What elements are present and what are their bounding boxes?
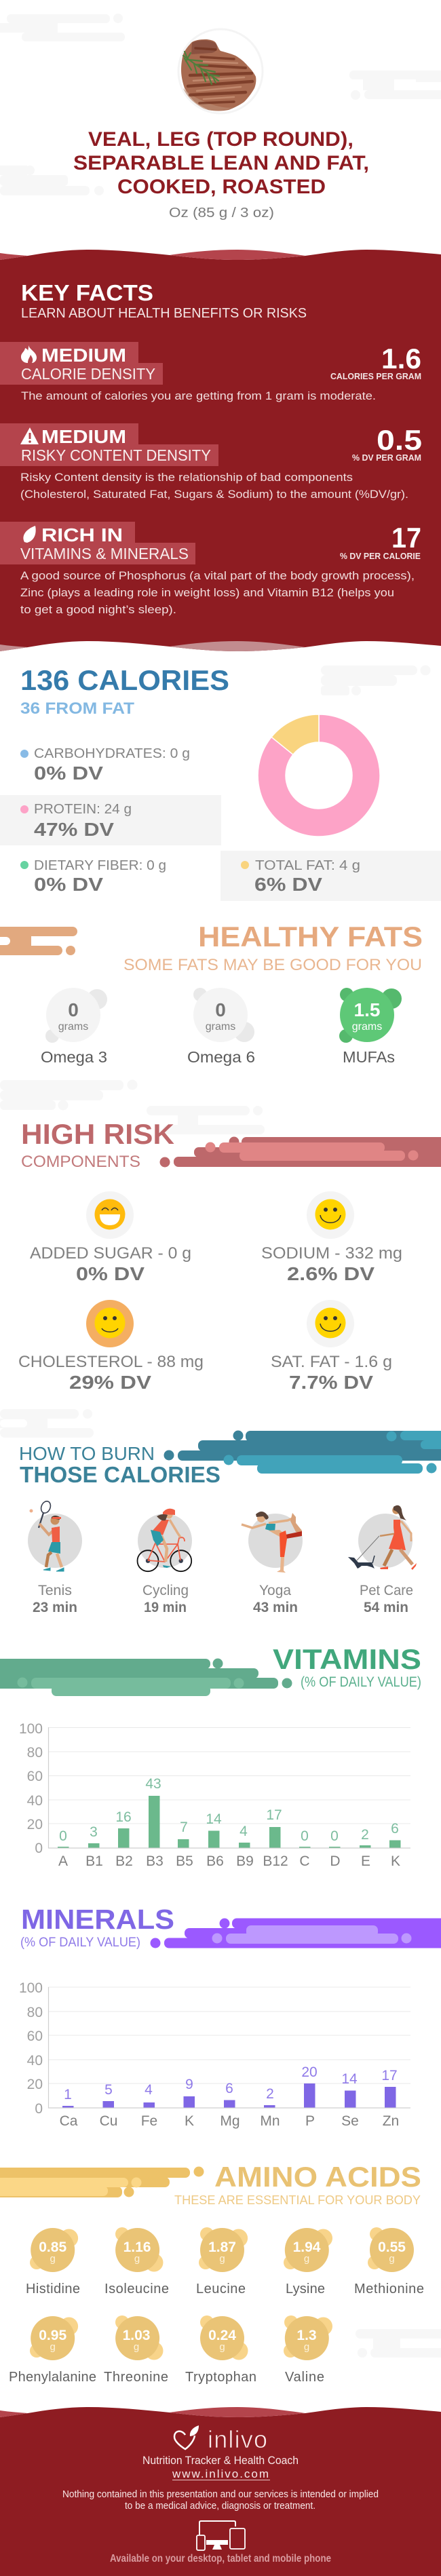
- bar chart: minerals: 40: [27, 2053, 43, 2069]
- fact: risky content density: 0.5: [377, 424, 422, 456]
- bar chart: vitamins: 6: [391, 1821, 399, 1837]
- bar chart: vitamins: E: [361, 1853, 370, 1869]
- bar chart: minerals: K: [185, 2113, 194, 2129]
- icon: desktop tablet and phone: [197, 2521, 245, 2550]
- panel: calories: [0, 664, 441, 901]
- fact: calorie density: The amount of calories you are getting from 1 gram is moderate.: [21, 389, 376, 402]
- amino: isoleucine: 1.16: [123, 2239, 151, 2255]
- activity: yoga: 43 min: [253, 1600, 298, 1615]
- item: sodium: [261, 1191, 402, 1284]
- fact: calorie density: MEDIUM: [41, 345, 126, 366]
- fact: rich in vitamins and minerals: A good source of Phosphorus (a vital part of the body growth process),: [20, 569, 415, 582]
- bar chart: minerals: Mg: [220, 2113, 240, 2129]
- bar chart: vitamins: 0: [301, 1828, 309, 1844]
- stat: mufas: 1.5: [354, 999, 380, 1020]
- bar chart: minerals: Ca: [60, 2113, 78, 2129]
- item: added sugar: ADDED SUGAR - 0 g: [30, 1244, 191, 1263]
- website link: www.inlivo.com: [172, 2467, 269, 2480]
- bar chart: vitamins: B3: [146, 1853, 164, 1869]
- amino: tryptophan: 0.24: [208, 2328, 236, 2343]
- stat: mufas: MUFAs: [343, 1048, 395, 1066]
- bar chart: minerals: 2: [266, 2086, 274, 2102]
- title: COOKED, ROASTED: [117, 176, 326, 198]
- bar chart: minerals: 5: [104, 2082, 113, 2098]
- icon: flame: [21, 345, 37, 363]
- amino: methionine: g: [389, 2253, 395, 2265]
- bar chart: minerals: 80: [27, 2005, 43, 2020]
- title: VEAL, LEG (TOP ROUND),: [88, 128, 353, 151]
- stat: omega 3: 0: [68, 999, 79, 1020]
- item: added sugar: 0% DV: [76, 1263, 145, 1284]
- amino: phenylalanine: 0.95: [39, 2328, 66, 2343]
- bar chart: vitamins: 0: [35, 1841, 43, 1856]
- heading: calories: 136 CALORIES: [20, 664, 229, 696]
- bar chart: minerals: Cu: [100, 2113, 117, 2129]
- stat: omega 3: grams: [58, 1021, 88, 1033]
- legend: dietary fiber: DIETARY FIBER: 0 g: [34, 858, 166, 873]
- amino: histidine: 0.85: [39, 2239, 66, 2255]
- item: cholesterol: 29% DV: [69, 1372, 151, 1393]
- fact: risky content density: (Cholesterol, Saturated Fat, Sugars & Sodium) to the amount (%DV/gr).: [20, 488, 408, 501]
- subheading: vitamins: (% OF DAILY VALUE): [301, 1674, 421, 1690]
- fact: calorie density: 1.6: [381, 343, 421, 374]
- legend: protein: 47% DV: [34, 819, 114, 840]
- panel: vitamins: [0, 1643, 421, 1869]
- bar chart: vitamins: 43: [145, 1776, 161, 1792]
- amino: tryptophan: [185, 2315, 256, 2385]
- bar chart: minerals: 0: [35, 2101, 43, 2117]
- activity: cycling: [137, 1509, 192, 1615]
- bar chart: vitamins: K: [391, 1853, 400, 1869]
- bar chart: vitamins: B12: [263, 1853, 288, 1869]
- legend: total fat: TOTAL FAT: 4 g: [255, 858, 360, 873]
- fact: risky content density: [0, 423, 422, 501]
- label: cycling: Cycling: [142, 1583, 189, 1598]
- bar chart: vitamins: B1: [85, 1853, 103, 1869]
- heading: amino acids: AMINO ACIDS: [214, 2161, 421, 2193]
- icon: steak photo illustration: [178, 29, 263, 113]
- stat: mufas: [339, 988, 402, 1066]
- amino: leucine: 1.87: [208, 2239, 236, 2255]
- stat: omega 6: grams: [206, 1021, 235, 1033]
- amino: lysine: g: [304, 2253, 309, 2265]
- amino: methionine: Methionine: [354, 2282, 424, 2296]
- fact: risky content density: RISKY CONTENT DENSITY: [21, 446, 211, 464]
- label: tennis: Tenis: [38, 1583, 72, 1598]
- amino: methionine: [354, 2227, 424, 2296]
- stat: mufas: grams: [352, 1021, 382, 1033]
- amino: threonine: Threonine: [104, 2370, 168, 2385]
- bar chart: minerals: 100: [19, 1980, 43, 1996]
- fact: rich in vitamins and minerals: % DV PER CALORIE: [340, 551, 421, 561]
- bar chart: minerals: 1: [64, 2087, 72, 2102]
- bar chart: minerals: 20: [27, 2077, 43, 2092]
- amino: tryptophan: g: [219, 2341, 225, 2353]
- bar chart: vitamins: 2: [361, 1827, 369, 1843]
- amino: threonine: 1.03: [123, 2328, 150, 2343]
- fact: rich in vitamins and minerals: Zinc (plays a leading role in weight loss) and Vitamin B12 (helps you: [20, 586, 394, 599]
- donut chart: [258, 714, 380, 837]
- bar chart: vitamins: [19, 1721, 410, 1869]
- subheading: calories from fat: 36 FROM FAT: [20, 699, 134, 718]
- bar chart: vitamins: 4: [239, 1824, 248, 1839]
- legend: carbohydrates: [20, 746, 190, 784]
- label: yoga: Yoga: [259, 1583, 291, 1598]
- footer: [0, 2407, 441, 2576]
- heading: minerals: MINERALS: [21, 1904, 174, 1935]
- amino: valine: g: [304, 2341, 309, 2353]
- amino: leucine: Leucine: [196, 2282, 246, 2296]
- disclaimer: [62, 2489, 379, 2512]
- bar chart: vitamins: B2: [115, 1853, 133, 1869]
- stat: omega 6: Omega 6: [187, 1048, 255, 1066]
- bar chart: vitamins: D: [330, 1853, 341, 1869]
- item: added sugar: [30, 1191, 191, 1284]
- bar chart: vitamins: 7: [180, 1820, 188, 1835]
- stat: omega 3: [41, 988, 107, 1066]
- bar chart: vitamins: 60: [27, 1769, 43, 1784]
- bar chart: minerals: P: [305, 2113, 315, 2129]
- bar chart: minerals: Se: [341, 2113, 359, 2129]
- item: saturated fat: SAT. FAT - 1.6 g: [271, 1353, 392, 1371]
- fact: rich in vitamins and minerals: RICH IN: [41, 524, 123, 545]
- heading: those calories: THOSE CALORIES: [20, 1462, 220, 1487]
- bar chart: vitamins: 0: [330, 1828, 339, 1844]
- item: cholesterol: [18, 1300, 204, 1393]
- amino: isoleucine: [104, 2227, 169, 2296]
- panel: minerals: [19, 1904, 441, 2129]
- activity: tennis: 23 min: [33, 1600, 77, 1615]
- subheading: amino acids: THESE ARE ESSENTIAL FOR YOUR BODY: [174, 2193, 421, 2207]
- activity: yoga: [242, 1512, 303, 1615]
- bar chart: minerals: Fe: [141, 2113, 157, 2129]
- disclaimer: to be a medical advice, diagnosis or treatment.: [125, 2501, 315, 2512]
- bar chart: minerals: Zn: [383, 2113, 399, 2129]
- icon: leaf: [23, 526, 36, 543]
- bar chart: vitamins: 16: [115, 1809, 132, 1825]
- heading: healthy fats: HEALTHY FATS: [198, 921, 423, 953]
- bar chart: minerals: 6: [225, 2081, 233, 2096]
- fact: risky content density: Risky Content density is the relationship of bad components: [20, 471, 353, 484]
- stat: omega 3: Omega 3: [41, 1048, 107, 1066]
- item: saturated fat: [271, 1300, 392, 1393]
- subheading: key facts: LEARN ABOUT HEALTH BENEFITS OR RISKS: [21, 306, 307, 321]
- bar chart: minerals: 14: [341, 2071, 358, 2087]
- amino: histidine: Histidine: [26, 2282, 80, 2296]
- bar chart: vitamins: 17: [266, 1807, 282, 1823]
- bar chart: vitamins: B9: [236, 1853, 254, 1869]
- amino: isoleucine: Isoleucine: [104, 2282, 169, 2296]
- legend: dietary fiber: 0% DV: [34, 874, 103, 895]
- title: SEPARABLE LEAN AND FAT,: [73, 152, 369, 174]
- logo: inlivo heart: [174, 2425, 199, 2449]
- amino: threonine: [104, 2315, 168, 2385]
- amino: valine: 1.3: [296, 2328, 317, 2343]
- panel: high risk components: [18, 1118, 441, 1393]
- bar chart: minerals: 9: [185, 2077, 193, 2092]
- amino: valine: Valine: [285, 2370, 324, 2385]
- bar chart: vitamins: B6: [206, 1853, 224, 1869]
- bar chart: minerals: [19, 1980, 410, 2129]
- legend: protein: [20, 802, 132, 840]
- legend: dietary fiber: [20, 858, 166, 895]
- fact: calorie density: [0, 342, 421, 402]
- fact: rich in vitamins and minerals: to get a good night’s sleep).: [20, 603, 176, 616]
- item: saturated fat: 7.7% DV: [289, 1372, 373, 1393]
- activity: pet care: 54 min: [364, 1600, 408, 1615]
- bar chart: vitamins: 14: [206, 1811, 222, 1827]
- label: pet care: Pet Care: [360, 1583, 413, 1598]
- amino: lysine: Lysine: [286, 2282, 325, 2296]
- logo: inlivo wordmark: inlivo: [208, 2425, 267, 2453]
- panel: how to burn those calories: [19, 1430, 441, 1615]
- fact: calorie density: CALORIE DENSITY: [21, 365, 155, 383]
- fact: rich in vitamins and minerals: VITAMINS & MINERALS: [20, 545, 189, 562]
- bar chart: vitamins: B5: [176, 1853, 193, 1869]
- legend: protein: PROTEIN: 24 g: [34, 802, 132, 817]
- amino: methionine: 0.55: [378, 2239, 406, 2255]
- bar chart: vitamins: 0: [59, 1828, 67, 1844]
- bar chart: minerals: 17: [381, 2068, 398, 2083]
- bar chart: minerals: Mn: [260, 2113, 280, 2129]
- bar chart: vitamins: 40: [27, 1793, 43, 1809]
- fact: calorie density: CALORIES PER GRAM: [330, 371, 421, 381]
- icon: warning triangle: [20, 427, 39, 444]
- panel: healthy fats: [0, 921, 423, 1066]
- heading: vitamins: VITAMINS: [273, 1643, 421, 1675]
- activity: pet care: [348, 1505, 417, 1615]
- amino: phenylalanine: g: [50, 2341, 56, 2353]
- amino: histidine: g: [50, 2253, 56, 2265]
- bar chart: minerals: 4: [145, 2082, 153, 2098]
- stat: omega 6: 0: [215, 999, 226, 1020]
- fact: rich in vitamins and minerals: 17: [391, 522, 421, 554]
- panel: amino acids: [0, 2161, 424, 2385]
- tagline: Nutrition Tracker & Health Coach: [142, 2454, 299, 2467]
- stat: omega 6: [187, 988, 255, 1066]
- fact: risky content density: MEDIUM: [41, 426, 126, 447]
- disclaimer: Nothing contained in this presentation and our services is intended or implied: [62, 2489, 379, 2500]
- subheading: components: COMPONENTS: [21, 1153, 140, 1171]
- amino: histidine: [26, 2228, 80, 2296]
- fact: risky content density: % DV PER GRAM: [352, 453, 421, 463]
- legend: total fat: [241, 858, 360, 895]
- amino: lysine: [284, 2228, 332, 2296]
- bar chart: vitamins: 3: [90, 1824, 98, 1840]
- heading: high risk: HIGH RISK: [21, 1118, 174, 1150]
- bar chart: vitamins: C: [299, 1853, 310, 1869]
- panel: key facts: [0, 250, 441, 661]
- amino: threonine: g: [134, 2341, 139, 2353]
- title: [73, 128, 369, 198]
- amino: phenylalanine: Phenylalanine: [9, 2370, 96, 2385]
- legend: total fat: 6% DV: [254, 874, 322, 895]
- bar chart: vitamins: 80: [27, 1745, 43, 1761]
- heading: key facts: KEY FACTS: [21, 280, 153, 305]
- item: sodium: SODIUM - 332 mg: [261, 1244, 402, 1263]
- subheading: healthy fats: SOME FATS MAY BE GOOD FOR YOU: [123, 956, 422, 974]
- item: sodium: 2.6% DV: [287, 1263, 375, 1284]
- item: cholesterol: CHOLESTEROL - 88 mg: [18, 1353, 204, 1371]
- availability note: Available on your desktop, tablet and mobile phone: [110, 2553, 331, 2564]
- amino: tryptophan: Tryptophan: [185, 2370, 256, 2385]
- bar chart: vitamins: 100: [19, 1721, 43, 1737]
- bar chart: minerals: 60: [27, 2029, 43, 2044]
- bar chart: minerals: 20: [301, 2064, 318, 2080]
- amino: phenylalanine: [9, 2316, 96, 2385]
- bar chart: vitamins: A: [58, 1853, 68, 1869]
- fact: rich in vitamins and minerals: [0, 522, 421, 616]
- amino: leucine: [196, 2227, 248, 2296]
- serving size: Oz (85 g / 3 oz): [169, 206, 274, 220]
- subheading: minerals: (% OF DAILY VALUE): [20, 1936, 140, 1950]
- activity: cycling: 19 min: [144, 1600, 187, 1615]
- legend: carbohydrates: 0% DV: [34, 763, 103, 784]
- amino: lysine: 1.94: [293, 2239, 321, 2255]
- legend: carbohydrates: CARBOHYDRATES: 0 g: [34, 746, 190, 761]
- activity: tennis: [28, 1500, 82, 1615]
- heading: how to burn: HOW TO BURN: [19, 1443, 155, 1464]
- amino: valine: [284, 2315, 332, 2385]
- bar chart: vitamins: 20: [27, 1817, 43, 1832]
- amino: isoleucine: g: [134, 2253, 140, 2265]
- amino: leucine: g: [219, 2253, 225, 2265]
